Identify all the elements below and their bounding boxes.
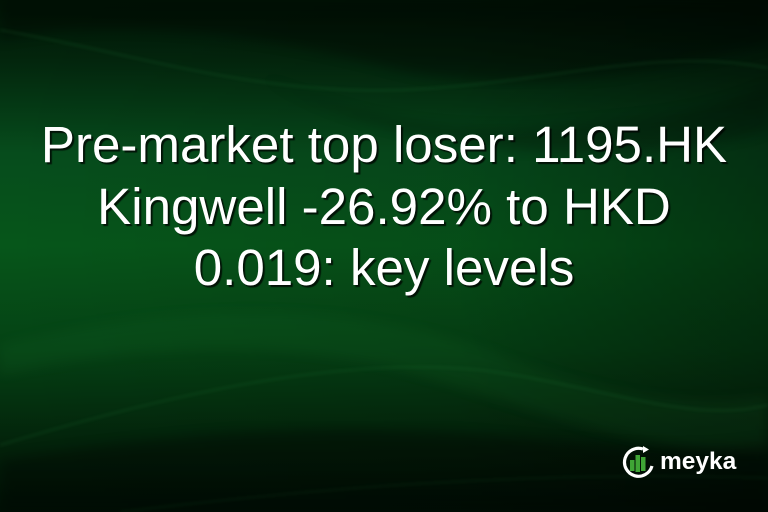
wordmark: meyka <box>660 448 736 475</box>
icon: meyka logo <box>622 446 654 478</box>
title <box>41 116 728 298</box>
title: 0.019: key levels <box>194 239 574 296</box>
title: Kingwell -26.92% to HKD <box>97 178 671 234</box>
title: Pre-market top loser: 1195.HK <box>41 116 727 173</box>
